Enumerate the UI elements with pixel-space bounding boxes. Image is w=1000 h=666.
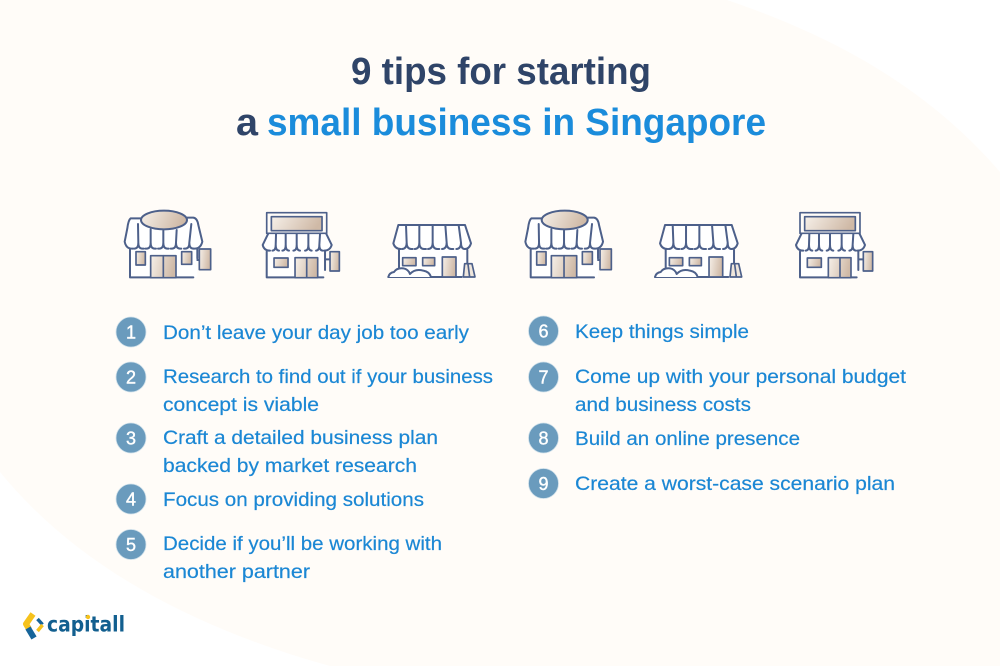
tip 4: Focus on providing solutions (163, 489, 424, 511)
tip 7: Come up with your personal budget (575, 366, 907, 388)
logo wordmark: capitall (47, 612, 125, 636)
tip 9: 9 (538, 474, 549, 494)
tip 8 (528, 423, 800, 453)
tip 6 (528, 316, 749, 346)
tip 7: 7 (538, 368, 549, 388)
tip 7: and business costs (575, 394, 751, 416)
tip 7 (528, 362, 907, 416)
tip 5: another partner (163, 561, 311, 583)
tip 3 (116, 423, 438, 477)
tip 6: 6 (538, 322, 549, 342)
tip 8: 8 (538, 428, 549, 448)
tip 1 (116, 317, 469, 347)
tip 2: concept is viable (163, 394, 319, 416)
tip 6: Keep things simple (575, 321, 749, 343)
tip 5: Decide if you’ll be working with (163, 533, 442, 555)
tip 5 (116, 530, 442, 583)
tip 3: backed by market research (163, 455, 417, 477)
tip 8: Build an online presence (575, 428, 800, 450)
tip 4 (116, 484, 424, 514)
title (236, 51, 766, 144)
icon: store with rectangular sign (263, 213, 339, 278)
logo: capitall (26, 612, 125, 638)
tip 1: Don’t leave your day job too early (163, 322, 469, 344)
storefront icon row (125, 211, 873, 278)
tip 1: 1 (126, 322, 136, 342)
icon: store with bushes (388, 225, 475, 277)
tip 3: 3 (126, 428, 136, 448)
tip 3: Craft a detailed business plan (163, 427, 438, 449)
title line 1: 9 tips for starting (351, 51, 651, 93)
icon: logo mark (26, 614, 42, 638)
logo i-dot accent (86, 615, 90, 619)
title line 2 dark word: a (236, 102, 259, 144)
icon: store with bushes (655, 225, 742, 277)
tip 2 (116, 362, 493, 416)
icon: store with oval sign (525, 211, 611, 278)
tip 2: 2 (126, 368, 136, 388)
icon: store with oval sign (125, 211, 211, 278)
tip 5: 5 (126, 535, 136, 555)
tip 9 (528, 468, 895, 498)
tip 2: Research to find out if your business (163, 366, 493, 388)
title line 2 highlight: small business in Singapore (267, 102, 766, 144)
tip 9: Create a worst-case scenario plan (575, 473, 895, 495)
icon: store with rectangular sign (796, 213, 873, 278)
tip 4: 4 (126, 490, 136, 510)
